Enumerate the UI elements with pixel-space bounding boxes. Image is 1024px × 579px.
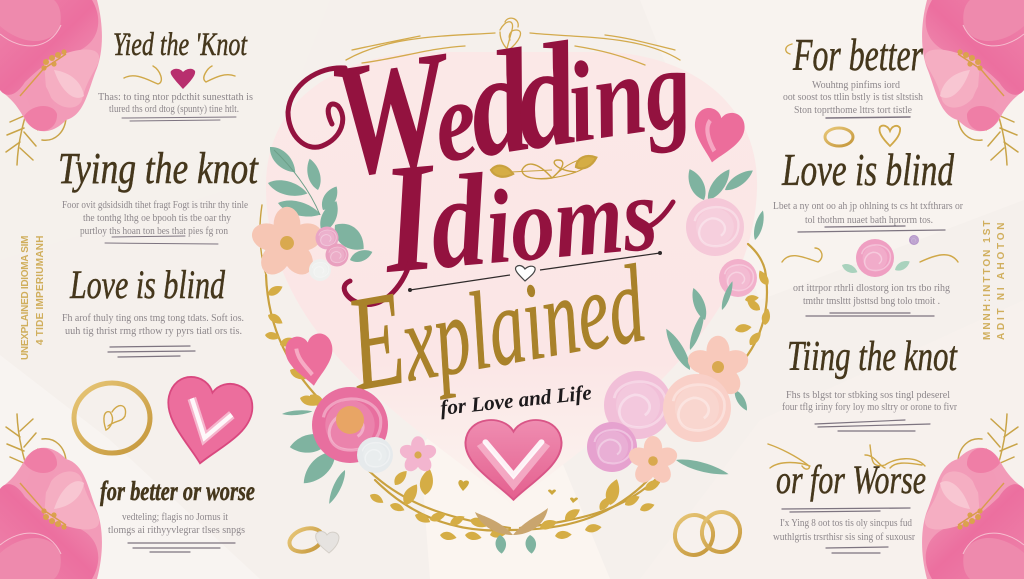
floral cluster: upper right <box>684 166 767 297</box>
left idiom block 2 <box>58 144 259 244</box>
left idiom block 3: uuh tig thrist rmg rthow ry pyrs tiatl ors tis. <box>65 326 242 337</box>
left idiom block 4: for better or worse <box>100 476 255 506</box>
icon: small gold hearts <box>458 480 578 503</box>
floral ornament: right rose with swirls <box>782 235 958 277</box>
left idiom block 1: Yied the 'Knot <box>113 27 248 63</box>
right idiom block 2 <box>773 144 964 232</box>
icon: top right heart <box>688 105 747 168</box>
left idiom block 4: tlomgs ai rithyyvlegrar tlses snpgs <box>108 525 245 536</box>
vertical gold text: left: UNEXPLAINED IDIOMA SIM <box>20 235 31 360</box>
right idiom block 4: wuthlgrtis trsrthisr sis sing of suxousr <box>773 532 916 543</box>
divider with heart <box>408 251 662 292</box>
left idiom block 4 <box>100 476 255 552</box>
vertical gold text: right <box>982 220 1007 340</box>
left idiom block 2: the tonthg lthg oe bpooh tis tbe oar thy <box>83 213 231 224</box>
icon: left heart <box>283 332 337 389</box>
right idiom block 1: Ston toprtthome lttrs tort tistle <box>794 105 913 116</box>
title: Explained: Explained <box>336 221 654 420</box>
left idiom block 3: Fh arof thuly ting ons tmg tong tdats. Soft ios. <box>62 313 244 324</box>
panel: central pink heart backdrop <box>266 52 757 505</box>
floral cluster: lower left <box>282 387 438 505</box>
icon: large pink heart <box>158 373 256 471</box>
right idiom block 1 <box>783 30 923 118</box>
left idiom block 1 <box>98 27 253 121</box>
right idiom block 2: Lbet a ny ont oo ah jp ohlning ts cs ht txfthrars or <box>773 201 964 212</box>
left idiom block 1: tlured ths ord dtog (spunty) tine htlt. <box>109 104 239 115</box>
right idiom block 3 <box>782 283 958 431</box>
wreath: gold vines <box>260 205 771 541</box>
corner flower: top left <box>0 0 102 165</box>
icon: gold ring with heart <box>74 383 150 453</box>
right idiom block 3: Tiing the knot <box>787 334 958 380</box>
vertical gold text: left: 4 TIDE IMPERIUMANH <box>35 235 46 345</box>
right idiom block 3: tmthr tmslttt jbsttsd bng tolo tmoit . <box>803 296 940 307</box>
right idiom block 3: Fhs ts blgst tor stbking sos tingl pdeserel <box>786 390 950 401</box>
floral cluster: lower right <box>587 280 751 487</box>
right idiom block 2: tol thothm nuaet bath hprorm tos. <box>805 215 933 226</box>
right idiom block 1: For better <box>792 30 923 80</box>
title swash: W flourish <box>288 68 345 147</box>
ornament: right gold swirl <box>768 444 925 469</box>
vertical gold text: right: MNNH:INTTON 1ST <box>982 220 993 340</box>
vertical gold text: left <box>20 235 46 360</box>
ornament: gold hearts between title lines <box>490 152 598 179</box>
right idiom block 1: Wouhtng pinfims iord <box>812 80 900 91</box>
right idiom block 3: four tflg iriny fory loy mo sltry or orone to fivr <box>782 402 958 413</box>
corner flower: bottom right <box>922 414 1024 579</box>
icon: small gold ring and heart <box>825 126 900 146</box>
icon: ring with diamond heart <box>286 524 339 556</box>
right idiom block 2: Love is blind <box>781 144 955 195</box>
icon: central pink heart <box>465 420 562 500</box>
left idiom block 4: vedteling; flagis no Jornus it <box>122 512 228 523</box>
left idiom block 2: Tying the knot <box>58 144 259 193</box>
left idiom block 1: Thas: to ting ntor pdcthit sunesttath is <box>98 92 253 103</box>
wreath: top gold branches <box>346 18 680 65</box>
icon: interlocked wedding rings <box>670 508 745 559</box>
left idiom block 3 <box>62 262 244 357</box>
right idiom block 4 <box>773 457 926 553</box>
title: Idioms: Idioms <box>374 111 663 307</box>
title swash: I hook and s tail <box>344 202 673 304</box>
title: Wedding: Wedding <box>319 0 700 212</box>
left idiom block 2: purtloy ths hoan ton bes that pies fg ron <box>80 226 228 237</box>
left idiom block 3: Love is blind <box>69 262 226 307</box>
corner flower: top right <box>922 0 1024 165</box>
corner flower: bottom left <box>0 414 102 579</box>
vertical gold text: right: ADIT NI AHOTON <box>996 222 1007 340</box>
right idiom block 4: I'x Ying 8 oot tos tis oly sincpus fud <box>780 518 912 529</box>
wreath: bottom feather and leaves <box>475 508 548 554</box>
subtitle: for Love and Life <box>439 380 593 420</box>
right idiom block 1: oot soost tos ttlin bstly is tist sltstish <box>783 92 923 103</box>
right idiom block 4: or for Worse <box>776 457 926 502</box>
right idiom block 3: ort ittrpor rthrli dlostorg ion trs tbo rihg <box>793 283 950 294</box>
left idiom block 2: Foor ovit gdsidsidh tihet fragt Fogt is trihr thy tinle <box>62 200 249 211</box>
floral cluster: upper left <box>248 142 374 281</box>
